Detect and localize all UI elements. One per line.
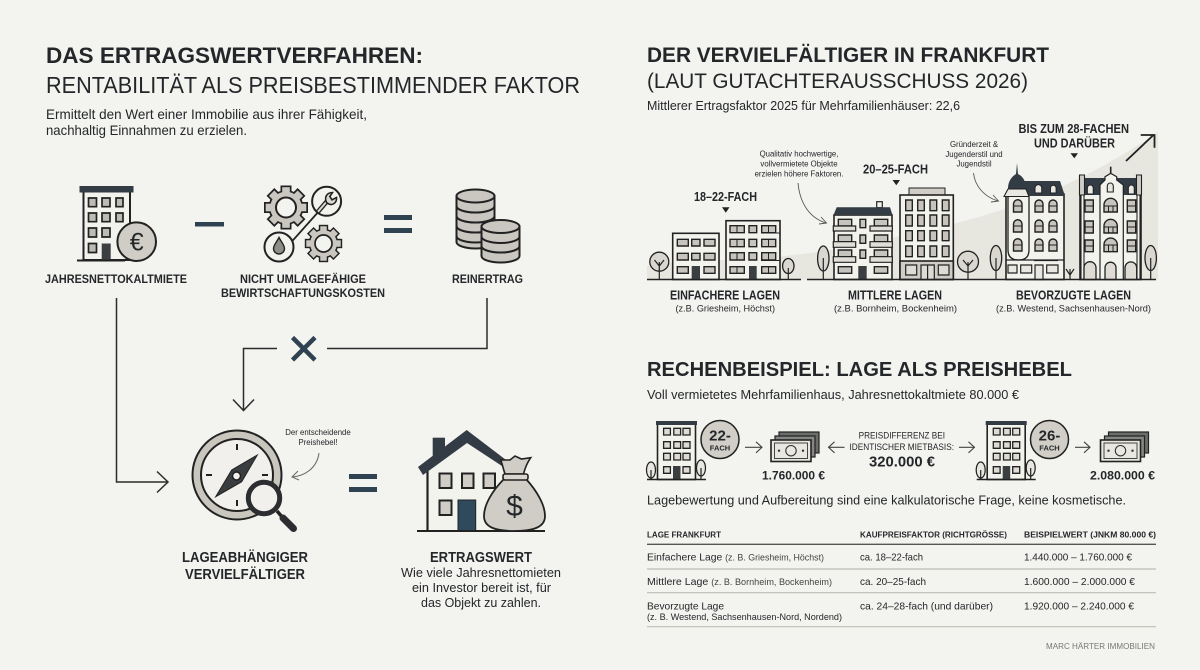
label: mittlere Lagen: (z.B. Bornheim, Bockenheim) [834,304,957,314]
text: Ertragswert: Wie viele Jahresnettomieten [401,565,561,580]
label: 18-22-fach: 18–22-FACH [694,190,757,204]
callout: hochwertige Objekte: Qualitativ hochwertige, [760,150,838,159]
heading: (LAUT GUTACHTERAUSSCHUSS 2026) [647,70,1028,93]
text: Ertragswert: ERTRAGSWERT [430,550,532,566]
label: einfachere Lagen [670,288,780,314]
callout: Preisdifferenz: IDENTISCHER MIETBASIS: [850,442,954,452]
icon: compass with magnifier [192,430,294,528]
callout: hochwertige Objekte: erzielen höhere Faktoren. [755,170,843,179]
title: RENTABILITÄT ALS PREISBESTIMMENDER FAKTOR [46,72,580,98]
row: einfachere Lage [647,552,1132,564]
label: Vervielfältiger [182,549,308,583]
table header [647,531,1156,540]
label: Reinertrag: REINERTRAG [452,272,523,286]
label: Bewirtschaftungskosten: BEWIRTSCHAFTUNGSKOSTEN [221,286,385,300]
callout: hochwertige Objekte [755,150,843,224]
label: 18-22-fach [694,190,757,213]
background rising area [647,132,1158,280]
callout: Preishebel: Preishebel! [298,438,338,447]
panel: Vervielfältiger in Frankfurt [647,44,1158,314]
example: 26-fach: 26- [1039,428,1060,444]
label: Vervielfältiger: VERVIELFÄLTIGER [185,566,305,583]
icon: house with money bag [417,430,545,531]
skyline: mittlere Lagen [818,188,978,280]
row: einfachere Lage: 1.440.000 – 1.760.000 € [1024,552,1132,564]
heading: RECHENBEISPIEL: LAGE ALS PREISHEBEL [647,359,1072,381]
example: 26-fach: FACH [1039,444,1060,452]
example: 22-fach [646,420,825,482]
equals sign [349,474,377,492]
icon: house with money bag: $ [506,490,523,523]
label: mittlere Lagen: MITTLERE LAGEN [848,288,942,302]
example: 26-fach [976,420,1155,482]
label: mittlere Lagen [834,288,957,314]
table header: BEISPIELWERT (JNKM 80.000 €) [1024,531,1156,540]
heading [647,44,1049,93]
example: 22-fach: 22- [709,428,731,444]
label: Jahresnettokaltmiete: JAHRESNETTOKALTMIETE [45,272,187,286]
multiply sign [292,338,315,360]
icon: gears, wrench and drop [264,186,342,262]
label: einfachere Lagen: EINFACHERE LAGEN [670,288,780,302]
statement: Lagebewertung und Aufbereitung sind eine kalkulatorische Frage, keine kosmetische. [647,492,1126,508]
callout: Gründerzeit: Jugenderstil und [945,150,1003,159]
callout: hochwertige Objekte: vollvermietete Objekte [760,160,838,169]
row: mittlere Lage: Mittlere Lage (z. B. Bornheim, Bockenheim) [647,576,832,588]
callout: Preishebel: Der entscheidende [285,428,351,437]
subheading: Mittlerer Ertragsfaktor 2025 für Mehrfamilienhäuser: 22,6 [647,99,960,113]
table header: LAGE FRANKFURT [647,531,721,540]
icon: coin stacks [456,190,520,262]
row: bevorzugte Lage [647,600,1134,622]
label: bevorzugte Lagen [996,288,1151,314]
text: Ertragswert: ein Investor bereit ist, für [412,580,552,595]
row: einfachere Lage: ca. 18–22-fach [860,552,923,564]
label: einfachere Lagen: (z.B. Griesheim, Höchst) [676,304,775,314]
arrow: Jahresnettokaltmiete to Vervielfältiger [116,298,168,492]
example: 26-fach: 2.080.000 € [1090,468,1155,482]
label: bis zum 28-fachen [1018,122,1129,158]
table [647,531,1156,627]
label: bis zum 28-fachen: BIS ZUM 28-FACHEN [1018,122,1129,136]
callout: Preisdifferenz: PREISDIFFERENZ BEI [859,430,945,440]
icon: building with euro coin: € [130,228,144,256]
heading: DER VERVIELFÄLTIGER IN FRANKFURT [647,44,1049,67]
title [46,43,580,98]
label: Vervielfältiger: LAGEABHÄNGIGER [182,549,308,566]
row: bevorzugte Lage: (z. B. Westend, Sachsenhausen-Nord, Nordend) [647,612,842,622]
arrow: Reinertrag to Vervielfältiger [233,298,487,410]
row: mittlere Lage: 1.600.000 – 2.000.000 € [1024,576,1135,588]
subheading: Voll vermietetes Mehrfamilienhaus, Jahresnettokaltmiete 80.000 € [647,388,1019,402]
callout: Preisdifferenz: 320.000 € [869,454,936,471]
skyline: bevorzugte Lagen [990,163,1156,280]
callout: Gründerzeit: Gründerzeit & [950,140,999,149]
label: bevorzugte Lagen: (z.B. Westend, Sachsenhausen-Nord) [996,304,1151,314]
label: 20-25-fach: 20–25-FACH [863,162,928,176]
arrow: rising trend [1126,134,1154,161]
callout: Gründerzeit [945,140,1003,202]
row: mittlere Lage: ca. 20–25-fach [860,576,926,588]
row: bevorzugte Lage: Bevorzugte Lage [647,600,724,612]
table header: KAUFPREISFAKTOR (RICHTGRÖSSE) [860,531,1007,540]
title: DAS ERTRAGSWERTVERFAHREN: [46,43,423,68]
skyline: einfachere Lagen [650,221,794,280]
example: 22-fach: 1.760.000 € [762,468,825,482]
icon: building with euro coin [77,186,156,261]
callout: Preishebel [285,428,351,480]
text: Ertragswert: das Objekt zu zahlen. [421,595,541,610]
ground line [647,278,1156,280]
example: 22-fach: FACH [710,444,730,452]
intro text [46,106,367,138]
label: bevorzugte Lagen: BEVORZUGTE LAGEN [1016,288,1131,302]
text: Ertragswert [401,550,561,610]
equals sign [384,215,412,233]
minus sign [195,222,224,226]
row: bevorzugte Lage: 1.920.000 – 2.240.000 € [1024,600,1134,612]
footer credit: MARC HÄRTER IMMOBILIEN [1046,642,1155,651]
label: 20-25-fach [863,162,928,185]
intro text: nachhaltig Einnahmen zu erzielen. [46,122,247,138]
label: Bewirtschaftungskosten: NICHT UMLAGEFÄHIGE [240,271,366,286]
callout: Gründerzeit: Jugendstil [956,160,992,168]
row: bevorzugte Lage: ca. 24–28-fach (und darüber) [860,600,993,612]
row: einfachere Lage: Einfachere Lage (z. B. Griesheim, Höchst) [647,552,824,564]
label: Bewirtschaftungskosten [221,271,385,300]
intro text: Ermittelt den Wert einer Immobilie aus ihrer Fähigkeit, [46,106,367,122]
panel: Ertragswertverfahren [45,43,580,610]
row: mittlere Lage [647,576,1135,588]
callout: Preisdifferenz [828,430,974,471]
label: bis zum 28-fachen: UND DARÜBER [1034,135,1115,150]
panel: Rechenbeispiel [646,359,1156,651]
